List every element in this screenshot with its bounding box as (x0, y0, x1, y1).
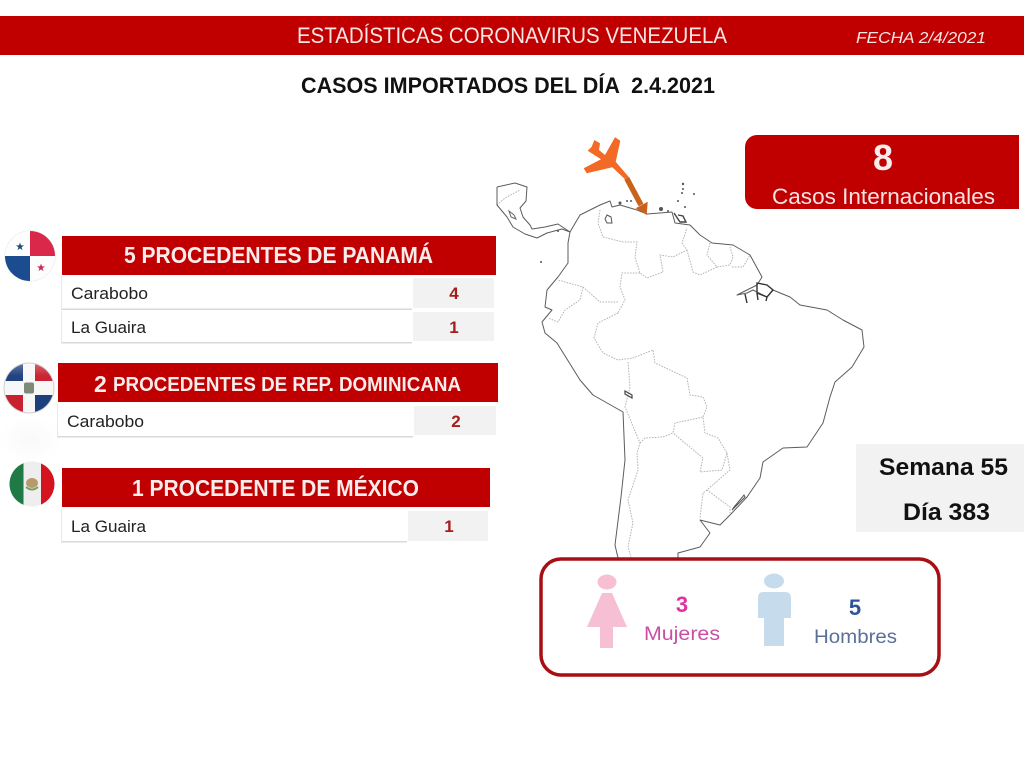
heading: 2 (94, 371, 107, 397)
row: La Guaira (61, 509, 488, 542)
heading: 5 PROCEDENTES DE PANAMÁ (124, 241, 433, 268)
header band (0, 16, 1024, 55)
panel: República Dominicana (4, 362, 498, 438)
row: Carabobo: Carabobo (71, 284, 148, 303)
icon: woman (587, 574, 627, 648)
heading (62, 236, 496, 275)
panel: México (9, 461, 490, 542)
women count: 3 (676, 592, 688, 617)
women count: Mujeres (644, 624, 720, 645)
row: Carabobo: 2 (451, 412, 461, 431)
icon: man (758, 574, 791, 646)
icon: Mexico flag (9, 461, 55, 507)
icon: Dominican Republic flag (4, 362, 54, 414)
women count (644, 592, 720, 645)
lakes and river details (605, 215, 612, 223)
arrow: flight to Venezuela (627, 178, 648, 215)
row: Carabobo: 4 (449, 284, 459, 303)
icon: Panama flag (4, 230, 56, 282)
islands (540, 183, 695, 263)
callout: international cases: 8 (873, 137, 893, 178)
header band: FECHA 2/4/2021 (856, 30, 986, 47)
callout: week and day: Semana 55 (879, 454, 1008, 481)
row: Carabobo (57, 404, 496, 438)
row: Carabobo: Carabobo (67, 412, 144, 431)
row: La Guaira: La Guaira (71, 318, 147, 337)
heading (62, 468, 490, 507)
callout: week and day: Día 383 (903, 499, 990, 526)
row: Carabobo (61, 276, 494, 310)
men count: 5 (849, 595, 861, 620)
heading: 1 PROCEDENTE DE MÉXICO (132, 474, 419, 501)
title: CASOS IMPORTADOS DEL DÍA 2.4.2021 (301, 73, 715, 98)
row: La Guaira: La Guaira (71, 517, 147, 536)
men count: Hombres (814, 627, 897, 648)
row: La Guaira: 1 (444, 517, 454, 536)
panel: gender breakdown (541, 559, 939, 675)
callout: international cases (745, 135, 1019, 209)
country borders (497, 190, 750, 557)
men count (814, 595, 897, 648)
callout: international cases: Casos Internacionales (772, 184, 995, 209)
heading (58, 363, 498, 402)
coastline (497, 183, 864, 558)
row: La Guaira (61, 311, 494, 344)
callout: week and day (856, 444, 1024, 532)
panel: Panamá (4, 230, 496, 344)
row: La Guaira: 1 (449, 318, 459, 337)
heading: PROCEDENTES DE REP. DOMINICANA (113, 374, 461, 396)
map: South America (497, 183, 864, 558)
header band: ESTADÍSTICAS CORONAVIRUS VENEZUELA (297, 23, 727, 48)
icon: airplane (584, 137, 629, 179)
